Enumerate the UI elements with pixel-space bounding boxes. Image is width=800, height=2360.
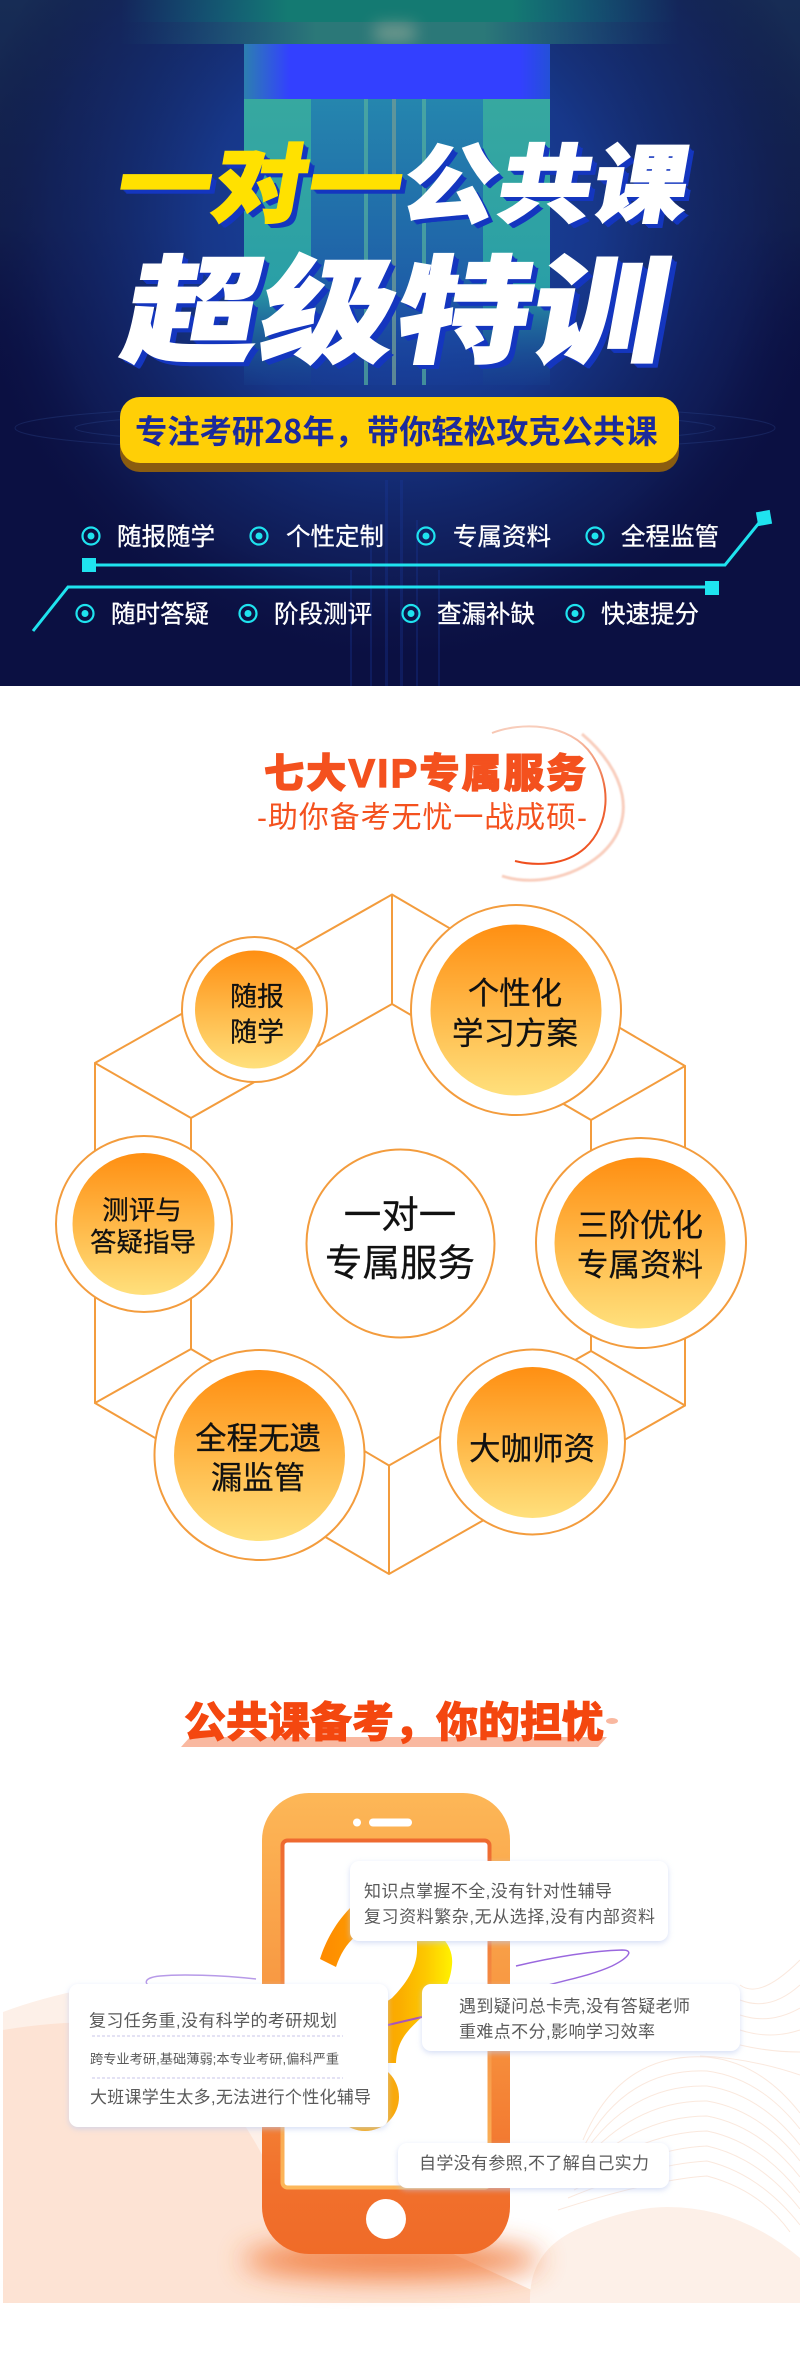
node: 三阶优化专属资料: 三阶优化 (577, 1207, 703, 1243)
phone screen (282, 1840, 490, 2188)
card: questions: 遇到疑问总卡壳,没有答疑老师 (459, 1997, 690, 2016)
card: self study: 自学没有参照,不了解自己实力 (419, 2154, 649, 2173)
card: questions: 重难点不分,影响学习效率 (459, 2022, 655, 2042)
question mark (320, 1906, 452, 2131)
feature labels: 全程监管 (621, 523, 719, 551)
node: 随报随学: 随学 (230, 1018, 284, 1048)
centre circle: 一对一 (344, 1194, 456, 1236)
node: 个性化学习方案: 个性化 (468, 975, 562, 1011)
node: 测评与答疑指导: 测评与 (102, 1196, 182, 1226)
yellow slogan pill (120, 397, 679, 463)
node: 测评与答疑指导 (56, 1136, 232, 1312)
card: knowledge and materials: 复习资料繁杂,无从选择,没有内部资料 (364, 1908, 655, 1926)
node: 个性化学习方案: 学习方案 (452, 1015, 578, 1051)
section heading: 公共课备考，你的担忧 (184, 1699, 604, 1746)
home button (366, 2199, 406, 2239)
feature rows with connector lines (32, 510, 772, 632)
phone shadow (242, 2241, 542, 2279)
feature labels: 阶段测评 (274, 600, 372, 628)
connector line upper (82, 510, 772, 572)
phone illustration (262, 1793, 510, 2254)
centre circle: 专属服务 (325, 1242, 475, 1284)
section subheading: -助你备考无忧一战成硕- (257, 802, 587, 834)
card: study planning: 大班课学生太多,无法进行个性化辅导 (90, 2088, 371, 2107)
speaker (353, 1818, 412, 1826)
background shapes (3, 1988, 800, 2303)
centre circle (306, 1150, 494, 1338)
node: 三阶优化专属资料: 专属资料 (577, 1246, 703, 1282)
hero stage background (0, 0, 800, 686)
feature labels: 快速提分 (601, 600, 699, 628)
purple scribbles (146, 1950, 629, 2025)
panel: hero banner (0, 0, 800, 686)
node: 三阶优化专属资料 (536, 1138, 746, 1348)
section heading: 七大VIP专属服务 (264, 752, 586, 796)
node: 大咖师资: 大咖师资 (469, 1430, 595, 1466)
feature labels: 查漏补缺 (437, 600, 535, 628)
card: study planning: 复习任务重,没有科学的考研规划 (89, 2012, 337, 2030)
node: 随报随学 (182, 937, 327, 1082)
connector line lower (33, 581, 719, 631)
node: 全程无遗漏监管: 漏监管 (211, 1460, 305, 1496)
node: 测评与答疑指导: 答疑指导 (90, 1228, 196, 1258)
node: 随报随学: 随报 (230, 982, 284, 1012)
heading underline (181, 1718, 618, 1747)
feature labels: 个性定制 (286, 523, 384, 551)
panel: public course worries (3, 1699, 800, 2303)
hexagonal frame (95, 894, 685, 1574)
title: 一对一公共课: 一对一公共课 (110, 139, 698, 234)
feature labels: 随报随学 (117, 523, 215, 551)
title: 超级特训: 超级特训 (114, 248, 681, 378)
feature labels (111, 523, 719, 628)
bullet icons (76, 528, 604, 622)
card: study planning: 跨专业考研,基础薄弱;本专业考研,偏科严重 (90, 2052, 339, 2066)
panel: seven VIP services (55, 725, 747, 1576)
card: questions (422, 1984, 740, 2051)
node: 全程无遗漏监管: 全程无遗 (195, 1420, 321, 1456)
slogan text: 专注考研28年，带你轻松攻克公共课 (135, 407, 658, 453)
card: knowledge and materials: 知识点掌握不全,没有针对性辅导 (364, 1882, 612, 1901)
card: study planning (69, 1984, 388, 2127)
node: 个性化学习方案 (411, 905, 621, 1115)
background wave lines (558, 1960, 800, 2232)
decorative title arcs (492, 726, 623, 880)
node: 全程无遗漏监管 (154, 1350, 364, 1560)
card: knowledge and materials (350, 1861, 668, 1941)
node: 大咖师资 (440, 1350, 625, 1534)
section heading (257, 752, 587, 834)
card: self study (398, 2143, 669, 2188)
feature labels: 专属资料 (453, 523, 551, 551)
feature labels: 随时答疑 (111, 600, 209, 628)
